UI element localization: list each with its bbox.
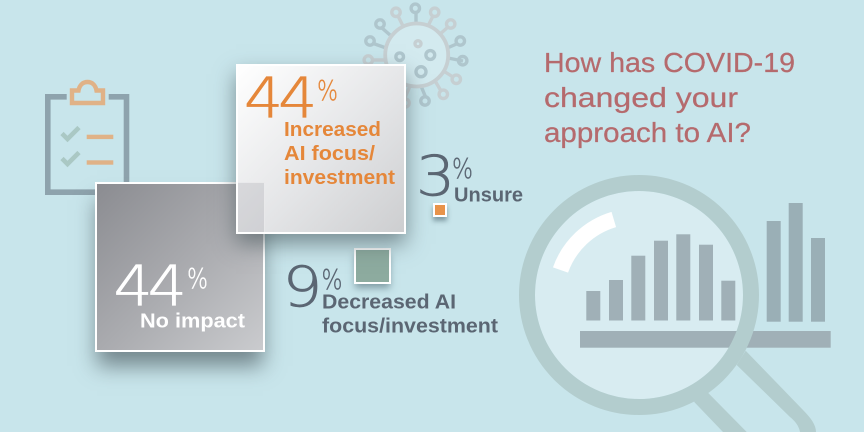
icon: virus [364, 4, 467, 107]
title [544, 47, 795, 148]
stat: 9% decreased AI focus/investment: 9 [282, 255, 322, 319]
bar chart [580, 203, 831, 348]
stat: 9% decreased AI focus/investment: focus/investment [322, 316, 498, 338]
stat: 44% no impact: % [187, 262, 208, 295]
stat: 3% unsure [416, 144, 523, 208]
swatch: unsure orange square [433, 203, 447, 217]
stat: 44% no impact [114, 254, 245, 332]
stat: 9% decreased AI focus/investment [282, 255, 498, 338]
stat: 9% decreased AI focus/investment: Decreased AI [322, 292, 456, 314]
title: How has COVID-19 [544, 47, 795, 78]
title: approach to AI? [544, 117, 751, 148]
stat: 44% increased AI focus/investment: investment [284, 167, 395, 189]
panel: increased AI focus card [236, 64, 406, 234]
swatch: decreased green square [354, 248, 391, 284]
icon: clipboard checklist [48, 82, 126, 192]
stat: 3% unsure: 3 [416, 144, 455, 208]
stat: 9% decreased AI focus/investment: % [322, 263, 342, 296]
stat: 44% increased AI focus/investment [244, 66, 395, 189]
icon: magnifying glass over bar chart [527, 183, 831, 432]
panel: no impact card [94, 182, 264, 352]
magnifier handle [694, 351, 816, 432]
stat: 3% unsure: Unsure [454, 184, 523, 206]
card overlap highlight [238, 182, 264, 232]
lens highlight [560, 220, 614, 270]
title: changed your [544, 82, 738, 113]
magnifier lens [535, 191, 743, 399]
stat: 44% increased AI focus/investment: % [317, 74, 338, 107]
magnifier ring [527, 183, 751, 407]
stat: 3% unsure: % [452, 152, 473, 185]
stat: 44% increased AI focus/investment: Increased [284, 119, 381, 141]
stat: 44% no impact: No impact [140, 310, 245, 332]
stat: 44% increased AI focus/investment: AI focus/ [284, 143, 375, 165]
stat: 44% no impact: 44 [114, 254, 182, 318]
stat: 44% increased AI focus/investment: 44 [244, 66, 313, 130]
